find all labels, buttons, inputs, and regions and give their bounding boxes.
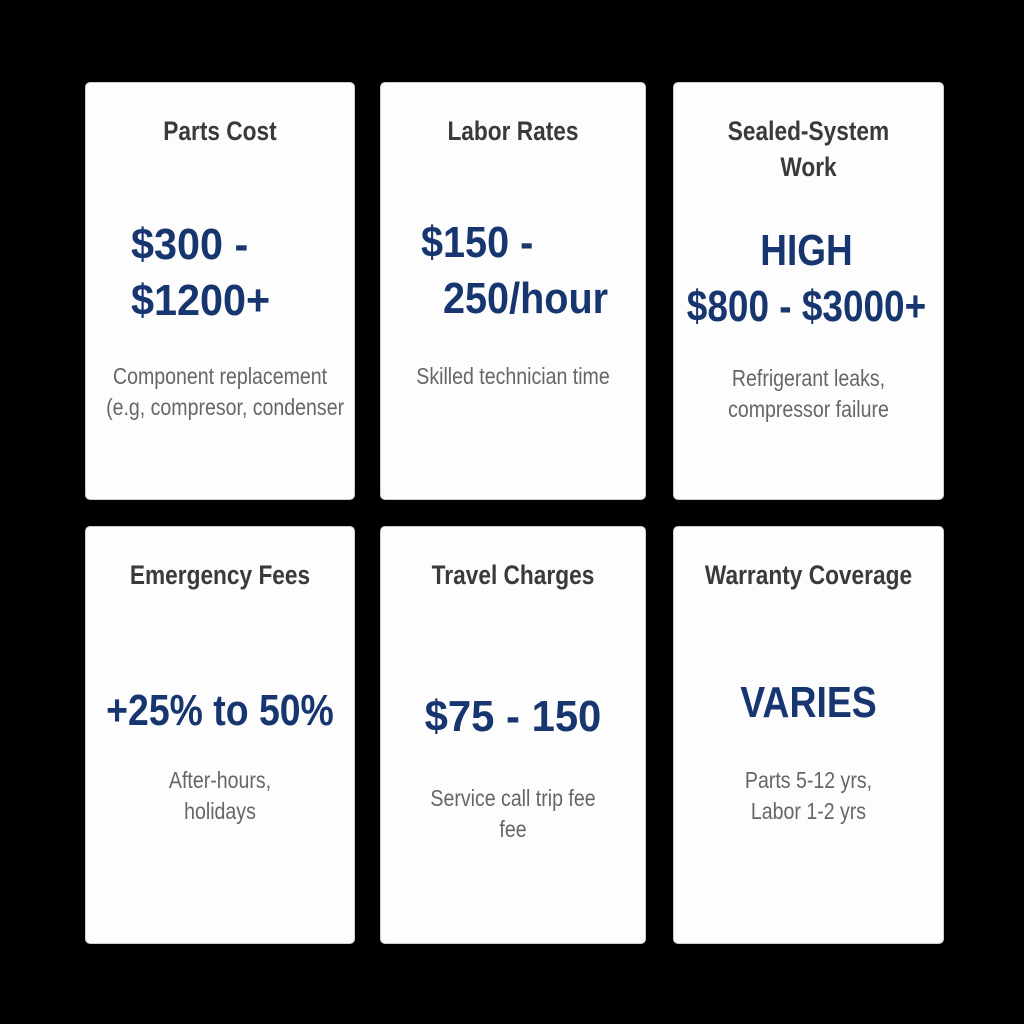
card: sealed-system work [673, 82, 944, 500]
description: (e.g, compresor, condenser [106, 394, 344, 420]
card: travel charges [380, 526, 646, 944]
value: $75 - 150 [425, 692, 601, 741]
description [728, 365, 889, 422]
value: $800 - $3000+ [687, 282, 926, 331]
value: 250/hour [443, 274, 608, 323]
value: $150 - [421, 218, 533, 267]
value: VARIES [740, 678, 877, 727]
value: +25% to 50% [106, 686, 334, 735]
description: Refrigerant leaks, [732, 365, 885, 391]
value [131, 220, 270, 325]
heading [728, 116, 889, 182]
heading: Sealed-System [728, 116, 889, 146]
description: compressor failure [728, 396, 889, 422]
description: Parts 5-12 yrs, [745, 767, 872, 793]
heading: Travel Charges [432, 560, 594, 590]
card: parts cost [85, 82, 355, 500]
description [430, 785, 596, 842]
value: $1200+ [131, 276, 270, 325]
description: Skilled technician time [416, 363, 610, 389]
heading: Emergency Fees [130, 560, 310, 590]
heading: Work [780, 152, 837, 182]
description: fee [499, 816, 527, 842]
description: After-hours, [169, 767, 271, 793]
description [745, 767, 872, 824]
description: holidays [184, 798, 256, 824]
value [687, 226, 926, 331]
heading: Warranty Coverage [705, 560, 912, 590]
card: labor rates [380, 82, 646, 500]
description: Component replacement [113, 363, 327, 389]
card: warranty coverage [673, 526, 944, 944]
description [169, 767, 271, 824]
value [421, 218, 608, 323]
heading: Labor Rates [447, 116, 579, 146]
description [106, 363, 344, 420]
card: emergency fees [85, 526, 355, 944]
value: $300 - [131, 220, 248, 269]
description: Service call trip fee [430, 785, 596, 811]
value: HIGH [760, 226, 853, 275]
description: Labor 1-2 yrs [751, 798, 866, 824]
heading: Parts Cost [163, 116, 277, 146]
